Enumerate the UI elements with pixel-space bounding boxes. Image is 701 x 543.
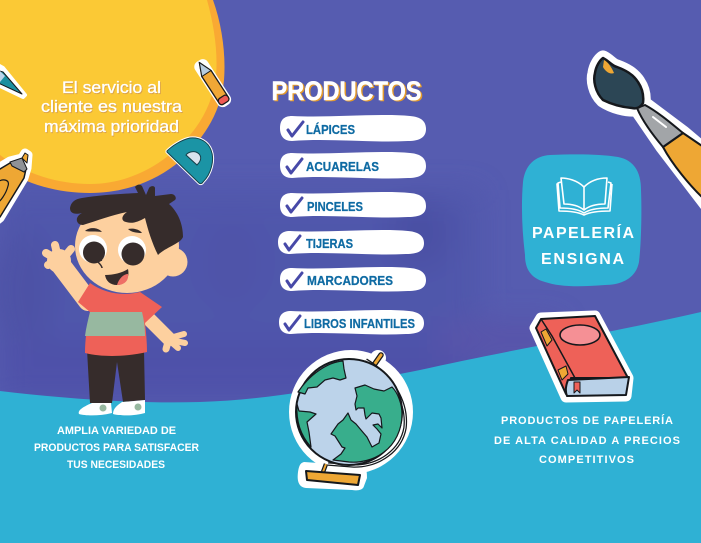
slogan text: El servicio al	[62, 78, 161, 97]
logo name	[532, 223, 634, 268]
item: tijeras	[278, 230, 424, 254]
icon: red book sticker	[535, 316, 629, 397]
icon: pencil sticker	[192, 57, 233, 109]
globe land masses	[297, 361, 402, 462]
slogan text: cliente es nuestra	[41, 97, 183, 116]
globe stand arc and peg	[323, 355, 405, 472]
boy left arm and hand	[46, 245, 88, 301]
list: products	[278, 115, 426, 334]
item: lápices: LÁPICES	[306, 122, 355, 137]
item: libros infantiles: LIBROS INFANTILES	[304, 317, 415, 331]
icon: protractor sticker	[167, 138, 213, 184]
teal wave bottom panel	[0, 312, 701, 543]
globe sphere	[296, 359, 402, 465]
caption: right: COMPETITIVOS	[539, 454, 634, 466]
icon: open book	[557, 178, 612, 215]
globe white outline	[289, 350, 413, 490]
heading: productos: PRODUCTOS	[273, 77, 423, 107]
slogan text: máxima prioridad	[45, 118, 180, 137]
logo name: ENSIGNA	[541, 251, 624, 268]
character: waving boy	[46, 185, 188, 415]
logo panel: papelería ensigna	[522, 154, 641, 286]
item: acuarelas: ACUARELAS	[306, 160, 379, 174]
icon: pen sticker	[0, 64, 25, 97]
item: tijeras: TIJERAS	[306, 237, 353, 251]
caption: right: DE ALTA CALIDAD A PRECIOS	[494, 435, 680, 447]
yellow circle	[0, 0, 225, 193]
caption: left	[34, 425, 199, 471]
icon: marker sticker	[0, 153, 28, 222]
slogan text: máxima prioridad	[44, 117, 179, 136]
item: acuarelas	[280, 152, 426, 178]
item: marcadores	[280, 267, 426, 291]
icon: globe sticker	[289, 350, 413, 490]
item: lápices	[280, 115, 426, 141]
caption: left: TUS NECESIDADES	[67, 459, 165, 471]
boy right arm and hand	[146, 316, 185, 349]
item: marcadores: MARCADORES	[307, 274, 393, 288]
caption: right: PRODUCTOS DE PAPELERÍA	[501, 414, 673, 427]
heading: productos: PRODUCTOS	[272, 76, 422, 106]
boy pants	[87, 350, 145, 403]
caption: right	[494, 414, 680, 466]
caption: left: AMPLIA VARIEDAD DE	[57, 425, 176, 437]
item: pinceles: PINCELES	[307, 200, 363, 214]
boy shirt	[78, 283, 162, 356]
slogan text: El servicio al	[63, 79, 162, 98]
logo name: PAPELERÍA	[532, 223, 634, 242]
item: libros infantiles	[279, 310, 424, 334]
slogan text	[41, 78, 183, 137]
boy head	[70, 185, 188, 293]
globe base	[306, 471, 360, 485]
boy shoes	[79, 400, 145, 415]
icon: paintbrush sticker	[594, 58, 701, 215]
slogan text: cliente es nuestra	[42, 98, 183, 117]
caption: left: PRODUCTOS PARA SATISFACER	[34, 442, 199, 454]
item: pinceles	[280, 192, 426, 217]
